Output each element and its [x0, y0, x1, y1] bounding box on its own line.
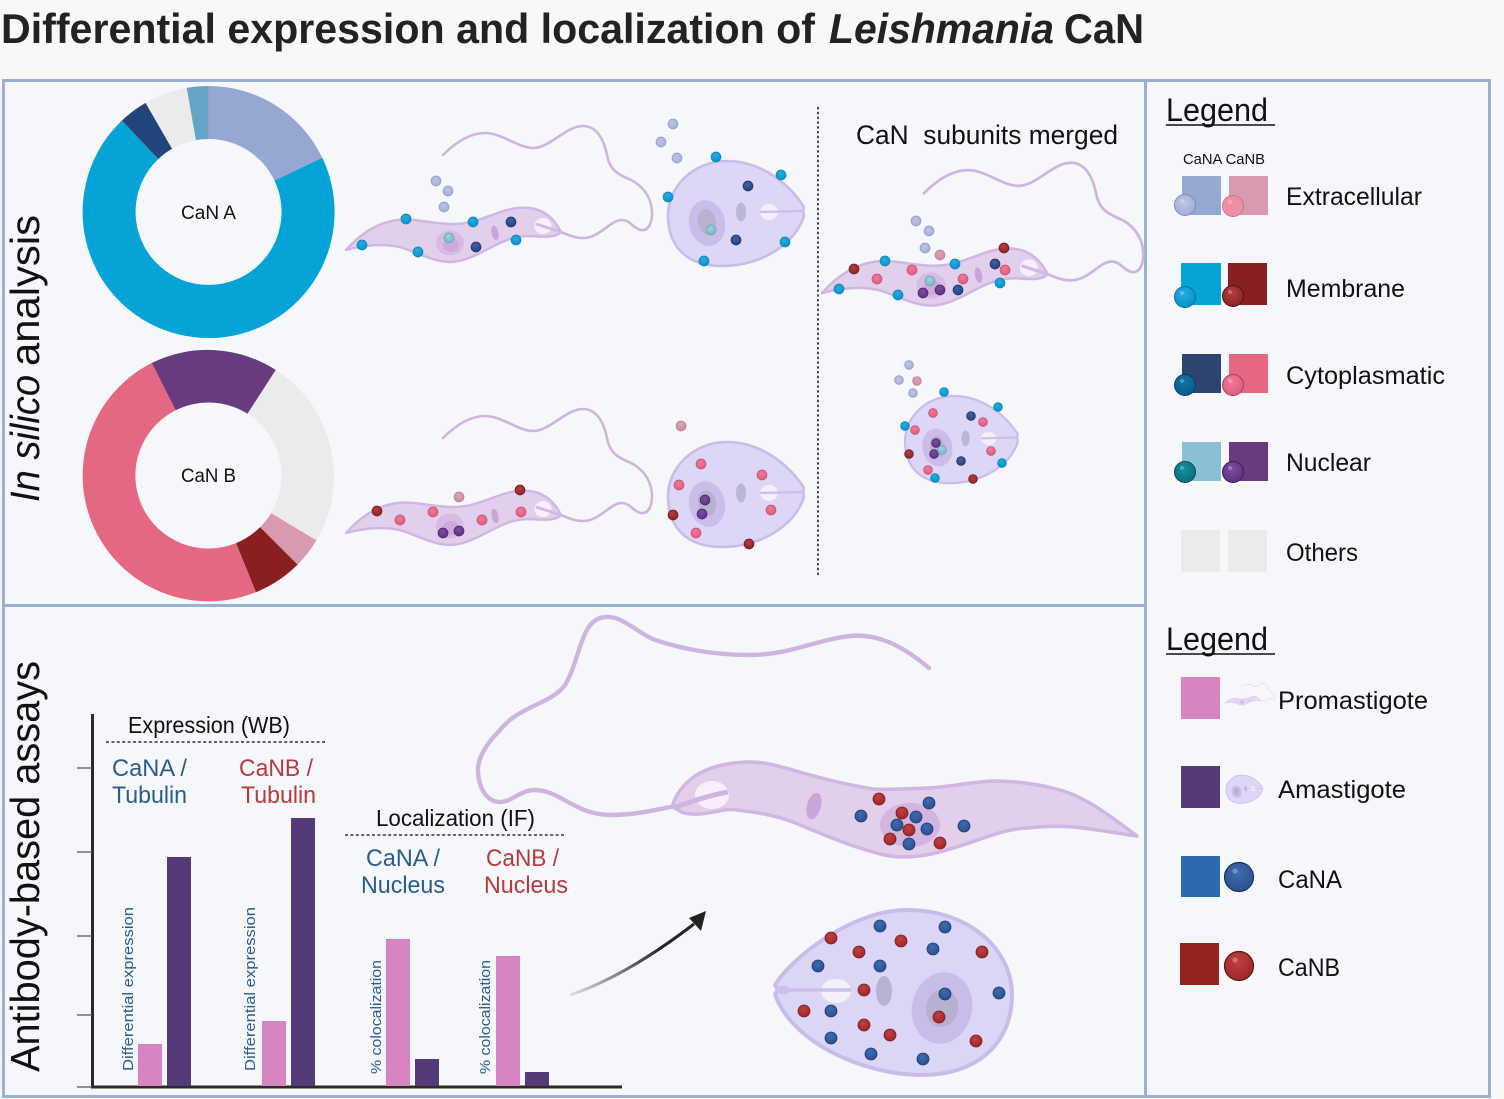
legend: localization: CaNA CaNB [1183, 151, 1265, 168]
bar chart: expression and localization: Nucleus [484, 872, 568, 899]
promastigote: CaN A [346, 126, 652, 262]
donut chart: CaN B [83, 350, 334, 601]
title: Differential expression and localization of [1, 5, 816, 52]
amastigote: merged [895, 361, 1018, 483]
bar chart: expression and localization: CaNA / [366, 845, 440, 872]
heading: in silico analysis: analysis [2, 215, 48, 366]
legend: localization [1166, 92, 1445, 572]
legend heading: Legend [1166, 92, 1268, 128]
chart heading: expression: Expression (WB) [128, 712, 290, 738]
bar chart: expression and localization: Differential expression [242, 907, 259, 1071]
bar chart: expression and localization: Tubulin [241, 782, 316, 809]
legend: stages and subunits: Amastigote [1278, 776, 1406, 804]
promastigote: CaN B [346, 409, 652, 545]
donut chart: CaN B: CaN B [181, 466, 236, 487]
donut chart: CaN A [83, 86, 335, 338]
divider: dashed vertical line [817, 107, 819, 577]
bar chart: expression and localization: CaNB / [486, 845, 559, 872]
legend heading: Legend [1166, 621, 1268, 657]
legend: stages and subunits: CaNB [1278, 954, 1340, 982]
large amastigote [775, 910, 1012, 1075]
bar chart: expression and localization: CaNB / [239, 755, 313, 782]
promastigote: merged [822, 163, 1143, 306]
legend: localization: Others [1286, 539, 1358, 567]
legend: stages and subunits: CaNA [1278, 866, 1342, 894]
donut chart: CaN A: CaN A [181, 203, 236, 224]
heading: CaN subunits merged: CaN subunits merged [856, 120, 1118, 150]
bar chart: expression and localization: Nucleus [361, 872, 445, 899]
large promastigote [478, 617, 1137, 857]
amastigote: CaN A [656, 119, 804, 266]
amastigote: CaN B [668, 421, 804, 549]
chart heading: localization: Localization (IF) [376, 805, 535, 831]
arrow [570, 911, 706, 995]
bar chart: expression and localization: CaNA / [112, 755, 187, 782]
legend: localization: Cytoplasmatic [1286, 362, 1445, 390]
title: Leishmania [829, 5, 1054, 52]
bar chart: expression and localization: Tubulin [112, 782, 187, 809]
bar chart: expression and localization: % colocalization [368, 960, 385, 1074]
legend: localization: Extracellular [1286, 183, 1422, 211]
heading: in silico analysis: In silico [2, 375, 48, 502]
title: CaN [1064, 5, 1144, 52]
legend: stages and subunits [1166, 621, 1428, 985]
legend: localization: Membrane [1286, 275, 1405, 303]
bar chart: expression and localization [77, 712, 622, 1088]
bar chart: expression and localization: Differential expression [120, 907, 137, 1071]
bar chart: expression and localization: % colocalization [477, 960, 494, 1074]
legend: localization: Nuclear [1286, 449, 1371, 477]
heading: antibody-based assays: Antibody-based assays [2, 661, 48, 1072]
legend: stages and subunits: Promastigote [1278, 687, 1428, 715]
